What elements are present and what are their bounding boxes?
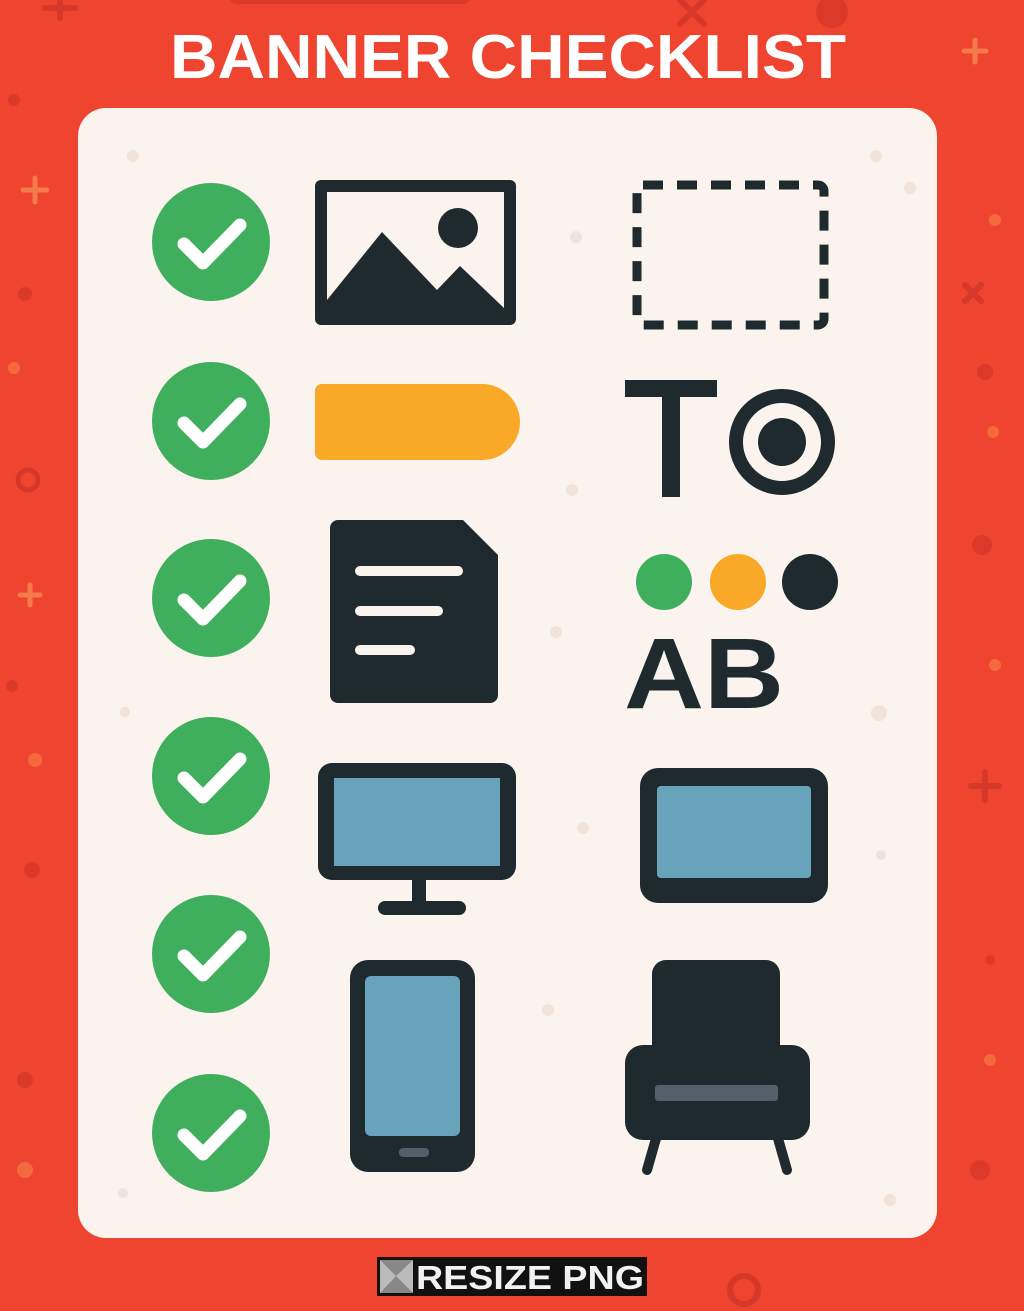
icon: tablet [640,768,828,903]
logo: resize png: RESIZE PNG [416,1259,644,1296]
icon: colors and fonts: AB [624,618,784,730]
icon: chair [625,960,810,1170]
icon: orange button [315,384,520,460]
title: BANNER CHECKLIST [170,23,846,92]
check icons column [152,183,270,1192]
icon: colors and fonts [624,554,838,730]
icon: dashed area [637,185,824,325]
icon: phone [350,960,475,1172]
icon: image [315,180,516,325]
icon: text and target [625,380,828,497]
panel: checklist card [78,108,937,1238]
icon: desktop monitor [318,763,516,915]
icon: document [330,520,498,703]
